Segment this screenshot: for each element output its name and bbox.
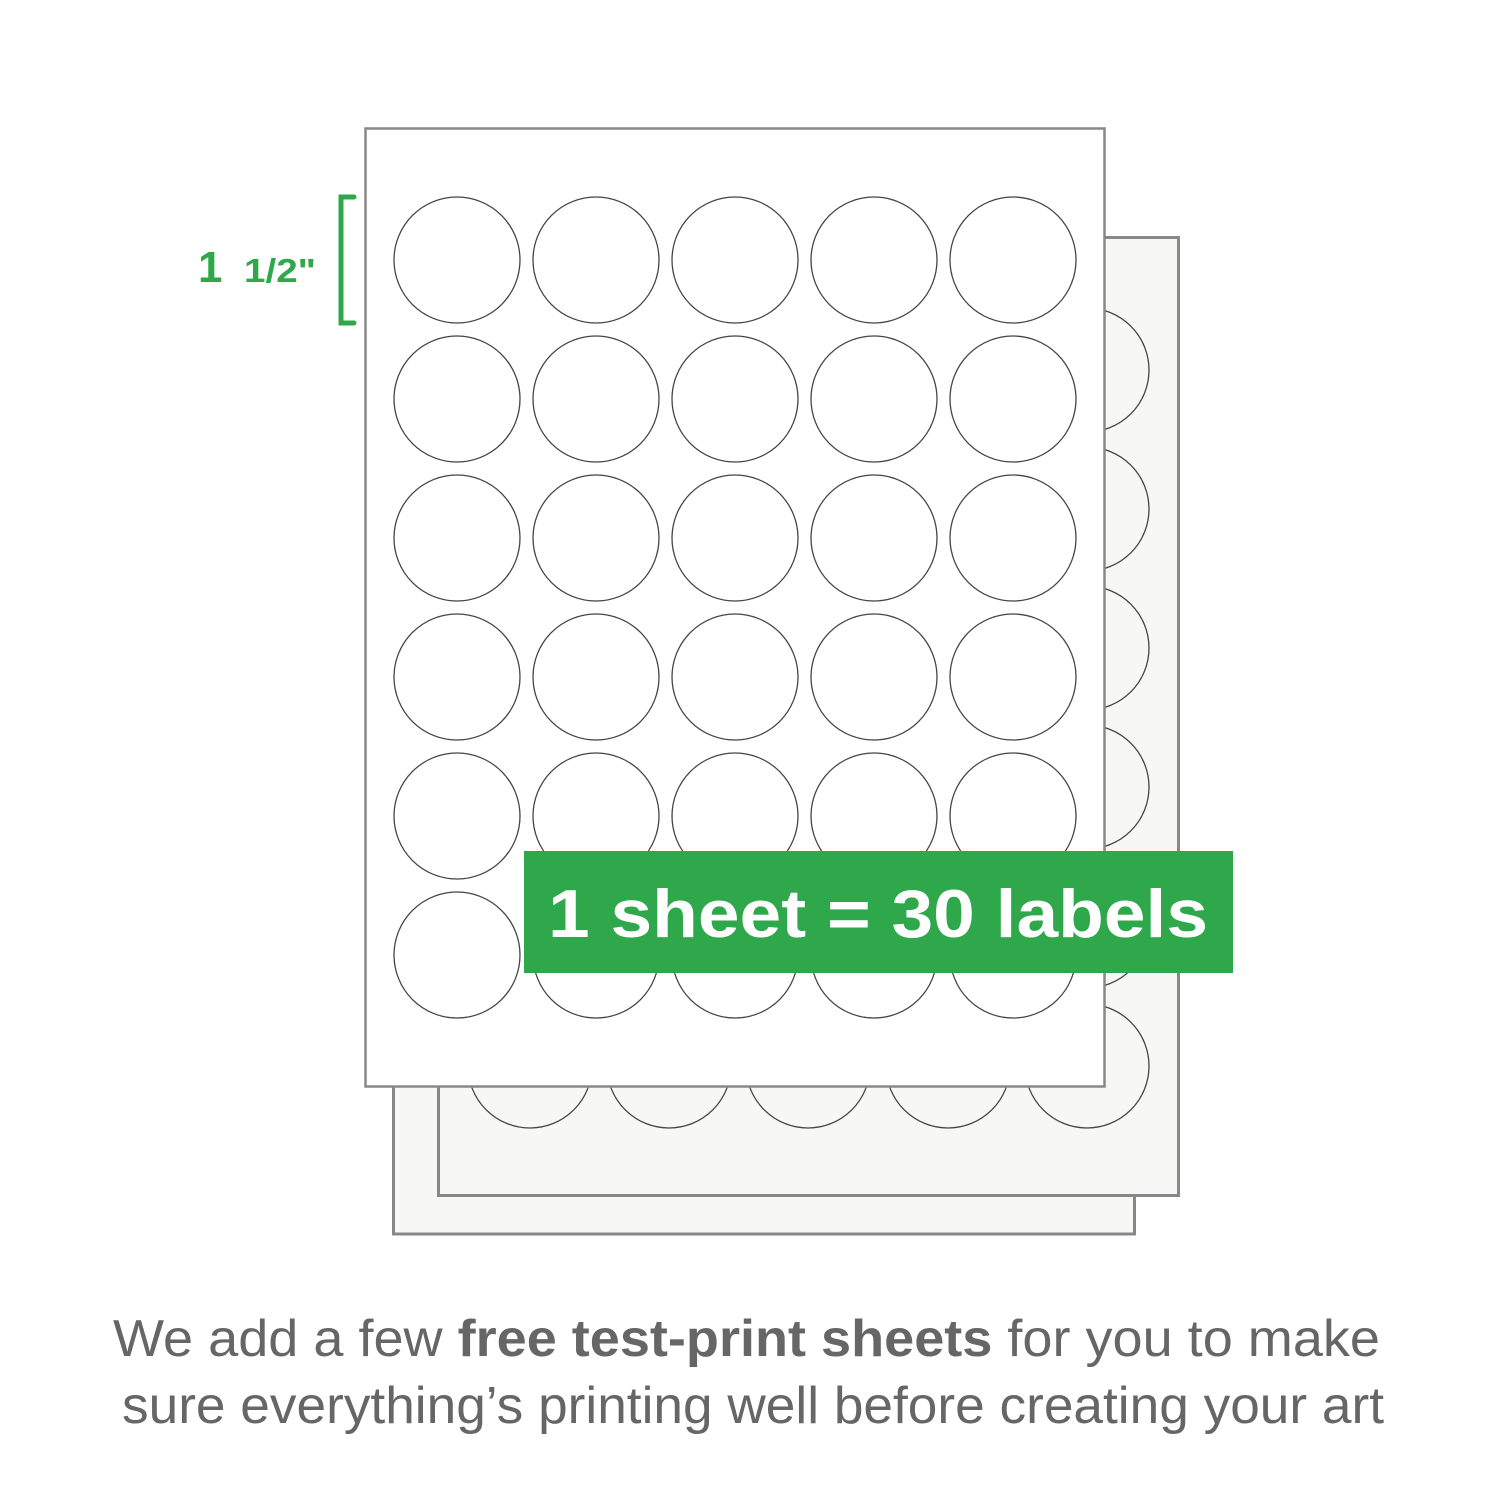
size label — [198, 243, 316, 292]
back sheet 1 with labels — [438, 238, 1178, 1196]
front sheet with 30 circle labels — [366, 128, 1104, 1086]
callout: 1 sheet = 30 labels: 1 sheet = 30 labels — [548, 876, 1208, 952]
size label: 1 — [198, 243, 222, 292]
size bracket — [341, 197, 354, 323]
back sheet 2 (bottom) — [394, 1000, 1134, 1234]
size label: 1/2" — [244, 252, 316, 289]
caption — [113, 1310, 1385, 1435]
callout: 1 sheet = 30 labels — [524, 851, 1233, 973]
caption: sure everything’s printing well before creating your art — [122, 1377, 1385, 1435]
caption: We add a few free test-print sheets for you to make — [113, 1310, 1380, 1368]
